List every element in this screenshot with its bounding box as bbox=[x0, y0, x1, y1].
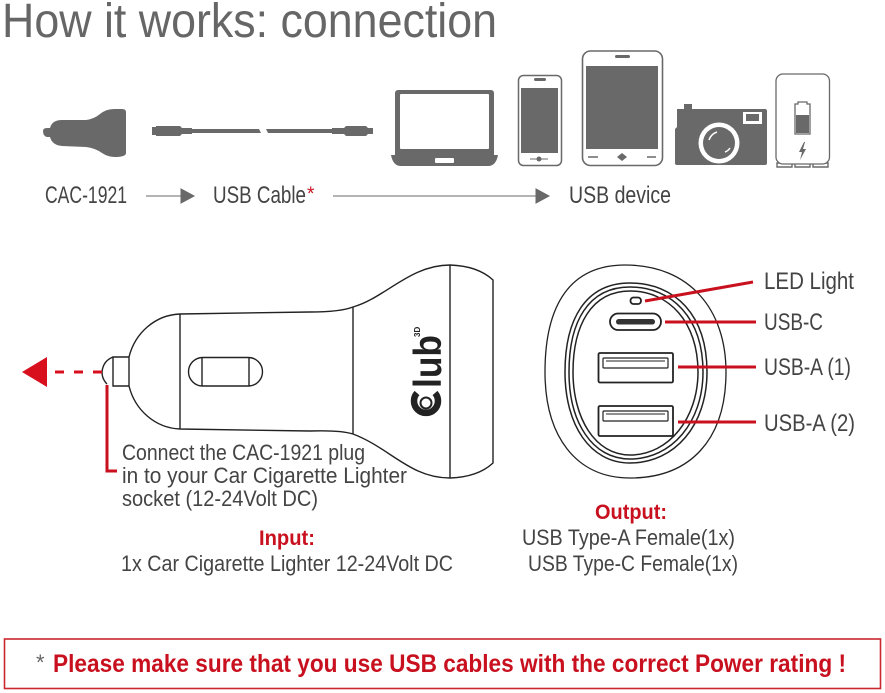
text: output bbox=[522, 501, 738, 576]
text: output: USB Type-C Female(1x) bbox=[528, 551, 738, 576]
logo: club 3D: 3D bbox=[413, 327, 422, 337]
text: output: Output: bbox=[595, 501, 667, 524]
text: connection instruction bbox=[122, 440, 407, 511]
USB-C port bbox=[610, 314, 661, 330]
diagram: charger front view bbox=[545, 265, 726, 478]
label: USB-C: USB-C bbox=[764, 309, 823, 336]
label: USB device: USB device bbox=[569, 182, 671, 209]
logo: club 3D: lub bbox=[407, 335, 450, 388]
arrow: charger to cable bbox=[146, 189, 194, 203]
diagram: large car charger side view bbox=[102, 265, 493, 478]
label: USB-A (2): USB-A (2) bbox=[764, 410, 855, 437]
text: output: USB Type-A Female(1x) bbox=[522, 525, 735, 550]
icon: small car charger bbox=[43, 109, 126, 157]
icon: USB cable bbox=[152, 126, 373, 136]
label: USB Cable: * bbox=[307, 184, 315, 205]
icon: tablet bbox=[582, 51, 662, 166]
warning box: * bbox=[36, 650, 45, 675]
arrow: red dashed plug direction bbox=[22, 357, 102, 387]
icon: power bank bbox=[776, 74, 830, 167]
text: input: 1x Car Cigarette Lighter 12-24Volt DC bbox=[121, 551, 453, 576]
USB-A port 2 bbox=[598, 406, 673, 436]
text: input: Input: bbox=[259, 527, 315, 550]
callout lines: ports bbox=[645, 282, 756, 422]
USB-A port 1 bbox=[598, 353, 673, 382]
callout line: plug bbox=[107, 385, 117, 471]
icon: smartphone bbox=[518, 76, 562, 166]
label: USB-A (1): USB-A (1) bbox=[764, 354, 851, 381]
logo: club 3D bbox=[407, 327, 450, 413]
text: connection instruction: socket (12-24Volt DC) bbox=[122, 486, 318, 511]
icon: camera bbox=[675, 104, 767, 165]
text: connection instruction: Connect the CAC-1921 plug bbox=[122, 440, 365, 465]
warning box bbox=[4, 639, 880, 688]
text: input bbox=[121, 527, 453, 576]
LED bbox=[630, 298, 641, 304]
label: CAC-1921: CAC-1921 bbox=[45, 182, 127, 209]
label: LED Light: LED Light bbox=[764, 268, 854, 295]
text: connection instruction: in to your Car Cigarette Lighter bbox=[122, 463, 407, 488]
icon: laptop bbox=[391, 90, 498, 166]
arrow: cable to device bbox=[333, 189, 549, 203]
label: USB Cable: USB Cable bbox=[213, 182, 306, 209]
